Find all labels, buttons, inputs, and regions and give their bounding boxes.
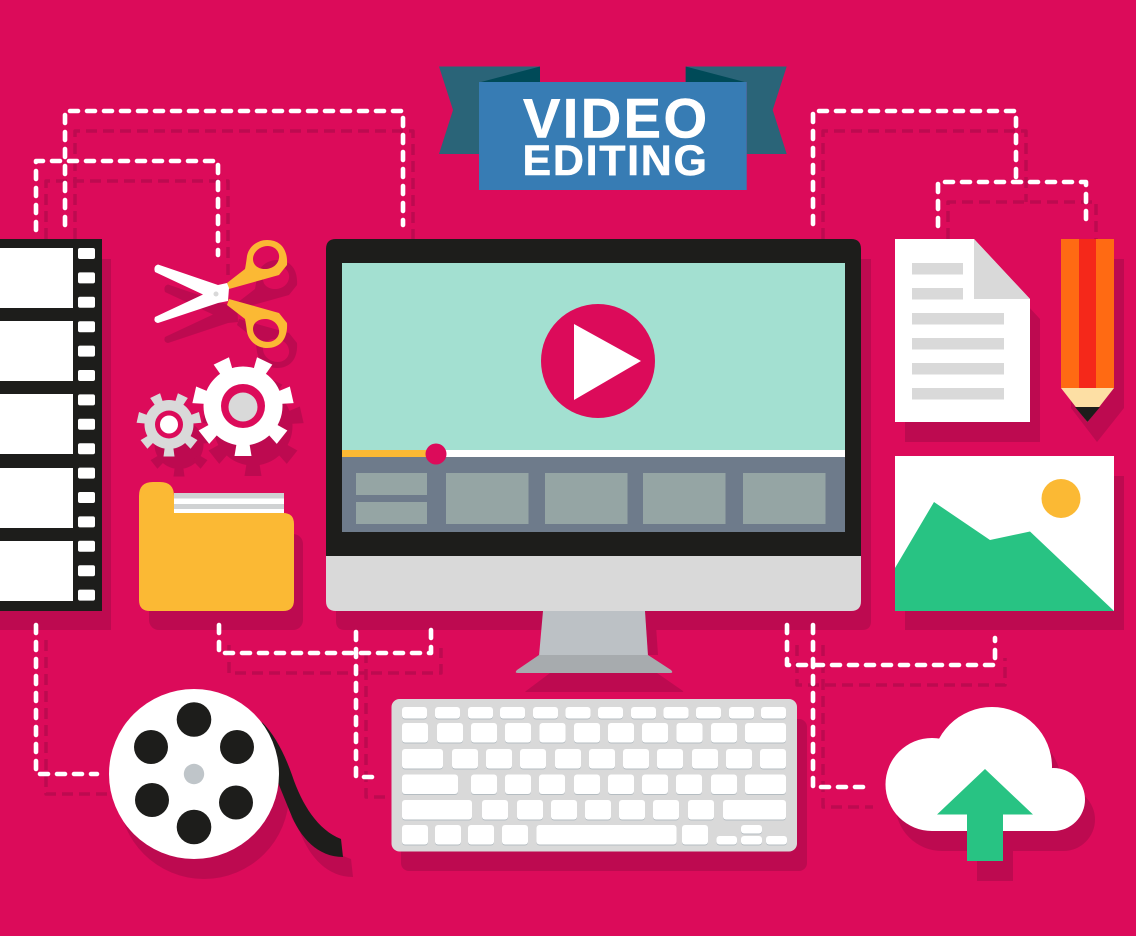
keyboard <box>392 699 797 852</box>
title banner <box>439 66 787 190</box>
document lines <box>912 263 1004 400</box>
monitor bezel <box>326 239 861 556</box>
folder body <box>139 482 294 611</box>
monitor stand <box>539 611 648 656</box>
film reel <box>109 689 343 859</box>
icon: folder <box>139 482 294 611</box>
keys <box>402 707 787 844</box>
film frames <box>0 248 73 601</box>
banner right tail <box>686 66 787 154</box>
sun <box>1042 479 1080 518</box>
gears shadow <box>147 377 304 476</box>
icon: document <box>895 239 1030 422</box>
icon: cloud upload <box>886 707 1085 861</box>
video screen <box>342 263 845 450</box>
loose film <box>262 722 343 857</box>
playhead <box>426 444 446 464</box>
reel holes <box>134 702 254 844</box>
title line 1: VIDEO <box>523 86 707 150</box>
folded corner <box>974 239 1030 299</box>
monitor <box>326 239 861 673</box>
connector shadows <box>46 131 1096 807</box>
reel hub <box>184 764 204 784</box>
folder paper <box>174 493 284 515</box>
film strip <box>0 239 102 611</box>
monitor chin <box>326 556 861 611</box>
dashed connectors <box>36 111 1086 787</box>
icon: pencil <box>1061 239 1114 422</box>
scissors shadow <box>164 260 297 368</box>
icon: scissors <box>154 240 287 348</box>
banner left tail <box>439 66 540 154</box>
title line 2: EDITING <box>522 137 707 185</box>
progress bar <box>342 450 845 457</box>
cloud <box>886 707 1085 831</box>
icon: small gear <box>137 393 201 456</box>
banner body <box>479 82 747 190</box>
icon: large gear <box>192 357 294 456</box>
reel disc <box>109 689 279 859</box>
mountains <box>895 502 1114 611</box>
sprocket holes <box>78 248 95 601</box>
upload arrow <box>937 769 1033 861</box>
play button <box>541 304 655 418</box>
timeline panel <box>342 457 845 532</box>
banner folds <box>481 66 745 82</box>
object shadows <box>0 259 1124 881</box>
icon: landscape picture <box>895 456 1114 611</box>
monitor base <box>516 655 672 673</box>
